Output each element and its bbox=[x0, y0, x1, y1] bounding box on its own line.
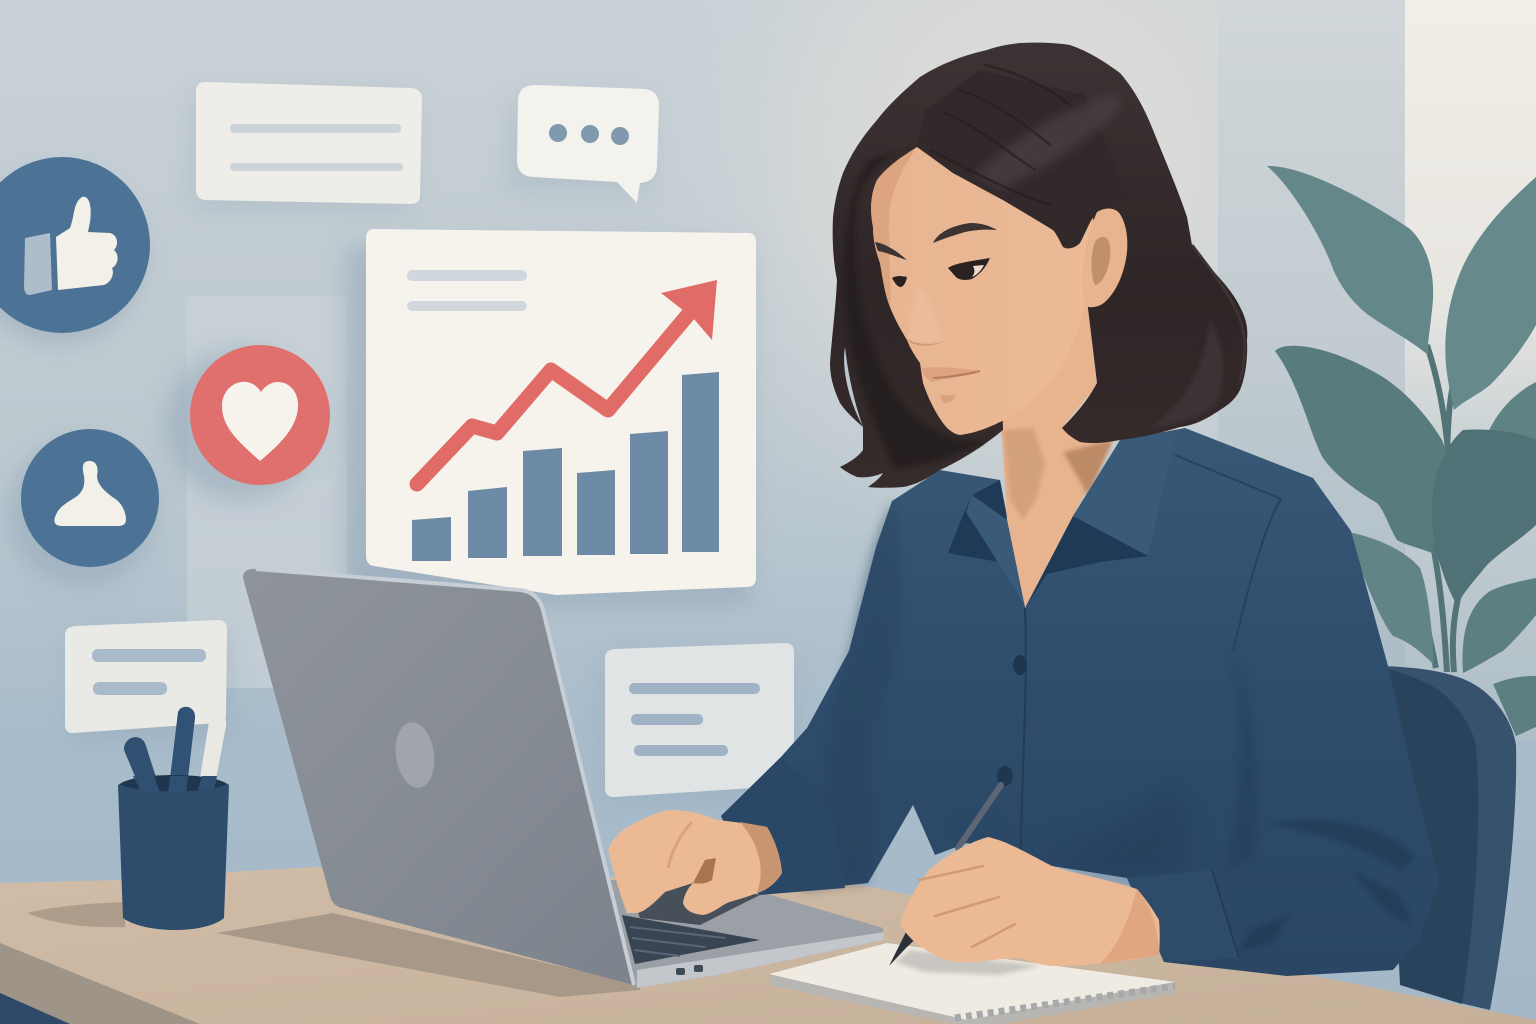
trend arrow bbox=[417, 280, 717, 484]
sleeve crease folds bbox=[1240, 820, 1415, 950]
pen blue 2 bbox=[168, 707, 195, 795]
cup cast shadow bbox=[27, 902, 125, 927]
pen bbox=[889, 785, 1001, 966]
pen white bbox=[198, 713, 226, 790]
strand 3 bbox=[985, 65, 1070, 105]
arrow line bbox=[417, 310, 692, 484]
collar left lapel bbox=[966, 495, 1025, 608]
laptop cast shadow bbox=[217, 913, 640, 997]
laptop front edge bbox=[637, 932, 884, 988]
badge shadow bbox=[8, 438, 156, 586]
panel: growth chart bbox=[345, 229, 756, 605]
badge shadow bbox=[164, 349, 316, 501]
plant bbox=[1267, 166, 1536, 736]
nose shadow bbox=[907, 340, 944, 346]
torso shade bbox=[960, 780, 1190, 885]
speech bubble: typing dots bbox=[506, 85, 659, 203]
shoulder and armhole seams bbox=[1175, 455, 1281, 651]
hand shape bbox=[900, 837, 1160, 966]
pen tip bbox=[889, 920, 930, 966]
finger creases bbox=[919, 866, 1015, 947]
collar left bbox=[948, 480, 1025, 608]
plant leaf: top left bbox=[1267, 166, 1433, 355]
plant leaf: low right bbox=[1462, 578, 1536, 673]
eye left bbox=[892, 276, 907, 287]
card line 1 bbox=[629, 683, 760, 694]
hair strands bbox=[930, 65, 1070, 205]
chart heading line 2 bbox=[407, 301, 527, 311]
bar 2 bbox=[468, 487, 507, 558]
mouth line bbox=[933, 371, 980, 378]
hair dark beside face bbox=[845, 147, 985, 470]
pen blue 1 bbox=[124, 737, 161, 793]
thumb cuff bbox=[24, 233, 52, 295]
nose highlight bbox=[908, 285, 942, 342]
dot 1 bbox=[549, 124, 567, 142]
eyebrow right bbox=[933, 223, 997, 243]
bar chart bbox=[412, 372, 719, 561]
badge circle bbox=[21, 429, 159, 567]
neck bbox=[1000, 300, 1113, 608]
collar right bbox=[1073, 432, 1176, 556]
arrow head bbox=[661, 280, 717, 340]
neck left shade bbox=[1003, 428, 1045, 520]
hand on laptop bbox=[608, 810, 782, 925]
hand shadow on page bbox=[895, 950, 1040, 975]
plant stems bbox=[1420, 345, 1460, 672]
left cuff bbox=[721, 758, 845, 895]
icon: third reaction badge bbox=[8, 429, 159, 586]
card body bbox=[196, 82, 422, 204]
plant leaf: centre big bbox=[1432, 429, 1536, 605]
finger gap bbox=[693, 858, 716, 884]
card line 3 bbox=[634, 745, 728, 756]
cup opening bbox=[120, 775, 227, 792]
wrist shade bbox=[740, 822, 782, 893]
button placket bbox=[1020, 608, 1026, 880]
floating card: top message bbox=[190, 82, 422, 214]
left sleeve shade bbox=[800, 501, 901, 892]
laptop base bbox=[600, 880, 884, 988]
shirt button 2 bbox=[997, 766, 1013, 786]
neck right shadow bbox=[1063, 440, 1113, 497]
card body bbox=[605, 643, 794, 797]
chin shadow bbox=[940, 393, 957, 403]
collar right underside bbox=[1025, 516, 1148, 608]
writing hand bbox=[900, 837, 1160, 966]
plant leaf: right small bbox=[1483, 382, 1536, 462]
right cuff bbox=[1127, 870, 1239, 962]
chair bbox=[1380, 666, 1516, 1010]
chair inner shade bbox=[1385, 668, 1478, 1004]
hair right lower highlight bbox=[1150, 320, 1223, 428]
strand 2 bbox=[960, 90, 1050, 145]
strand 1 bbox=[945, 113, 1035, 170]
right hair strand bbox=[1192, 245, 1245, 380]
card shadow bbox=[190, 92, 415, 214]
trackpad shadow under hand bbox=[635, 880, 760, 925]
desk corner dark bbox=[0, 993, 70, 1024]
port 1 bbox=[676, 968, 685, 975]
shirt button 1 bbox=[1013, 655, 1027, 675]
desk front edge bbox=[0, 943, 200, 1024]
upper lip bbox=[921, 367, 980, 382]
card text line 1 bbox=[230, 124, 401, 133]
port 2 bbox=[694, 965, 703, 972]
bar 4 bbox=[577, 470, 615, 555]
ear bbox=[1083, 208, 1127, 307]
dot 3 bbox=[611, 127, 629, 145]
notebook edge bbox=[769, 974, 1176, 1024]
shirt body bbox=[721, 428, 1439, 976]
hair silhouette bbox=[830, 43, 1247, 488]
pens inside cup bbox=[133, 776, 217, 793]
hand shape bbox=[608, 810, 782, 915]
floating card: lower left message bbox=[65, 620, 230, 742]
hair front sweep bbox=[917, 70, 1130, 248]
wall glow behind head bbox=[600, 0, 1218, 620]
hair highlight band bbox=[975, 95, 1121, 190]
card line 1 bbox=[92, 649, 206, 662]
floating panel: left faded card bbox=[187, 296, 347, 688]
card shadow bbox=[600, 652, 795, 802]
forehead side shade bbox=[871, 147, 917, 307]
lid logo bbox=[392, 720, 438, 790]
eye white bbox=[972, 265, 984, 277]
pen holder bbox=[118, 707, 229, 930]
chart shadow bbox=[345, 245, 750, 605]
ear inner bbox=[1091, 237, 1110, 285]
window bbox=[1405, 0, 1536, 740]
thumb hand bbox=[56, 197, 118, 290]
desk top bbox=[0, 867, 1536, 1024]
strand 4 bbox=[930, 150, 1050, 205]
eye right bbox=[948, 258, 990, 280]
chair back bbox=[1380, 666, 1516, 1010]
laptop lid bbox=[243, 569, 634, 985]
badge circle bbox=[190, 345, 330, 485]
face bbox=[871, 147, 1100, 435]
chart card bbox=[366, 229, 756, 595]
cup body bbox=[118, 776, 229, 930]
bar 5 bbox=[630, 431, 668, 554]
desk bbox=[0, 867, 1536, 1024]
eyebrow left bbox=[875, 242, 907, 260]
plant leaf: low left bbox=[1348, 532, 1434, 665]
bar 1 bbox=[412, 517, 451, 561]
card line 2 bbox=[631, 714, 703, 725]
laptop bbox=[243, 569, 884, 988]
right arm fold bbox=[1225, 640, 1258, 870]
badge shadow bbox=[0, 172, 144, 344]
bar 3 bbox=[523, 448, 562, 556]
wall light band bbox=[1218, 0, 1405, 720]
card body bbox=[65, 620, 227, 733]
icon: thumbs up badge bbox=[0, 157, 150, 344]
notebook bbox=[769, 943, 1176, 1024]
finger crease bbox=[668, 822, 692, 868]
hair slit left bbox=[844, 347, 863, 427]
icon: heart badge bbox=[164, 345, 330, 501]
pen upper barrel bbox=[958, 785, 1001, 848]
heart bbox=[222, 382, 298, 461]
keyboard bbox=[622, 915, 760, 964]
bubble body bbox=[517, 85, 659, 203]
notebook cover bbox=[769, 943, 1175, 1020]
plant leaf: middle left bbox=[1275, 346, 1452, 553]
dot 2 bbox=[581, 125, 599, 143]
badge glyph bbox=[54, 461, 126, 526]
plant leaf: bottom right bbox=[1493, 676, 1536, 736]
card shadow bbox=[70, 632, 230, 742]
plant leaf: top right bbox=[1445, 177, 1536, 410]
floating card: lower right message bbox=[600, 643, 795, 802]
bubble shadow bbox=[506, 100, 650, 192]
wrist shade bbox=[1100, 889, 1159, 964]
notebook spiral bbox=[955, 986, 1175, 1018]
lid edge highlight bbox=[256, 569, 634, 985]
card line 2 bbox=[93, 682, 167, 695]
badge circle bbox=[0, 157, 150, 333]
chart heading line 1 bbox=[407, 270, 527, 281]
bar 6 bbox=[682, 372, 719, 552]
cuff edge bbox=[1212, 870, 1239, 958]
woman bbox=[608, 43, 1439, 1024]
card text line 2 bbox=[230, 163, 403, 171]
key rows bbox=[630, 927, 725, 956]
